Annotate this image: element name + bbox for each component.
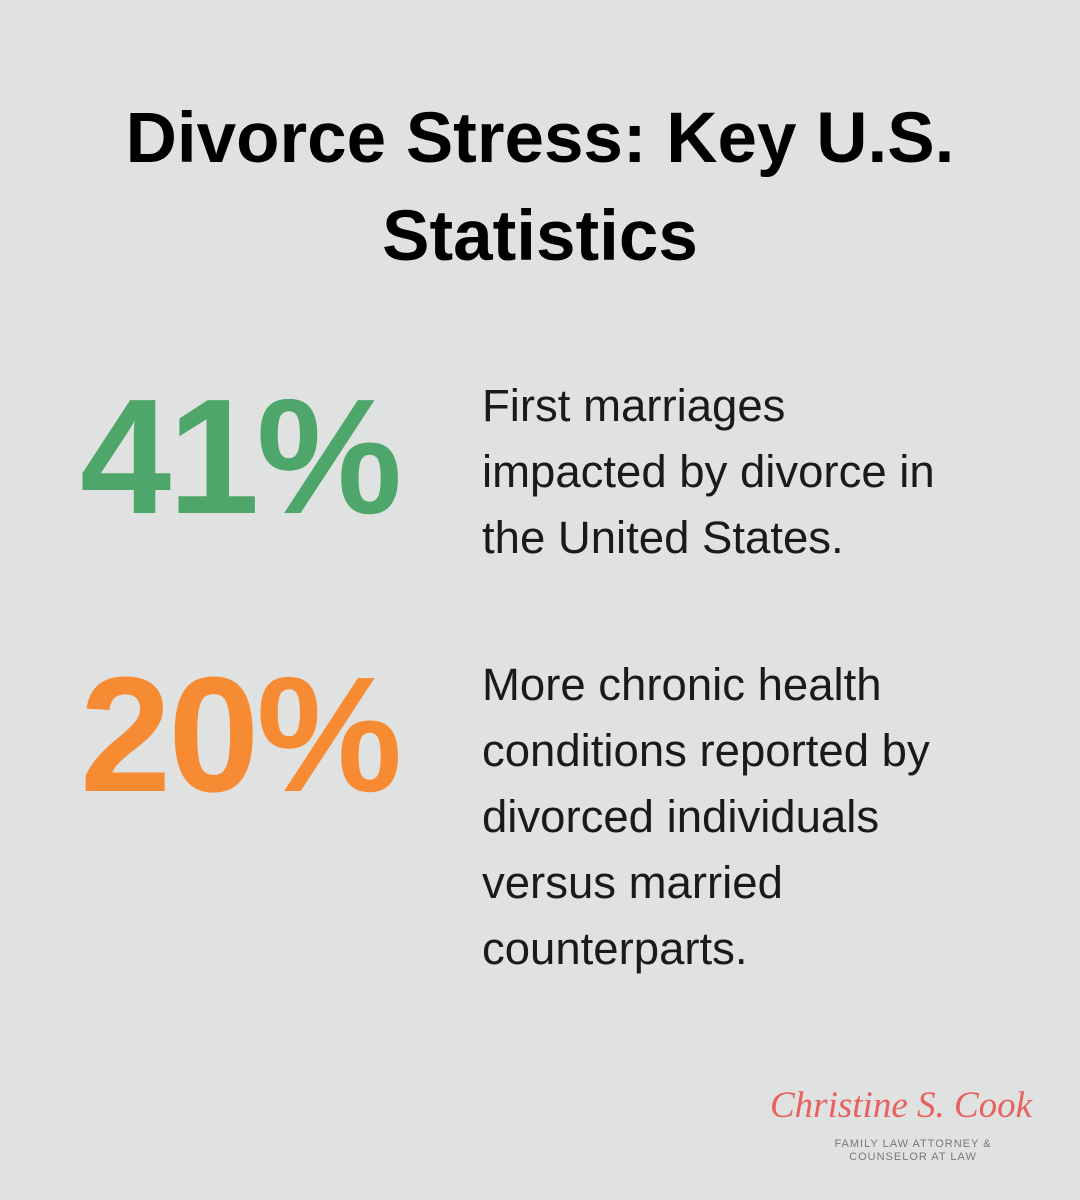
- text: first marriages: [482, 380, 935, 563]
- text: chronic health: More chronic health: [482, 659, 882, 710]
- logo tagline: FAMILY LAW ATTORNEY &: [834, 1138, 992, 1150]
- text: chronic health: versus married: [482, 857, 783, 908]
- logo tagline: [834, 1138, 992, 1163]
- number 20%: 20%: [80, 643, 399, 826]
- stat: 20%: [80, 643, 930, 974]
- text: chronic health: divorced individuals: [482, 791, 879, 842]
- number 41%: 41%: [80, 365, 399, 548]
- text: first marriages: the United States.: [482, 512, 844, 563]
- title: [126, 99, 954, 276]
- text: chronic health: counterparts.: [482, 923, 748, 974]
- stat: 41%: [80, 365, 935, 563]
- logo: [770, 1085, 1033, 1163]
- logo script name: Christine S. Cook: [770, 1085, 1032, 1126]
- text: first marriages: impacted by divorce in: [482, 446, 935, 497]
- text: chronic health: conditions reported by: [482, 725, 930, 776]
- title: Statistics: [382, 197, 698, 276]
- text: first marriages: First marriages: [482, 380, 785, 431]
- text: chronic health: [482, 659, 930, 974]
- title: Divorce Stress: Key U.S.: [126, 99, 954, 178]
- logo tagline: COUNSELOR AT LAW: [849, 1151, 977, 1163]
